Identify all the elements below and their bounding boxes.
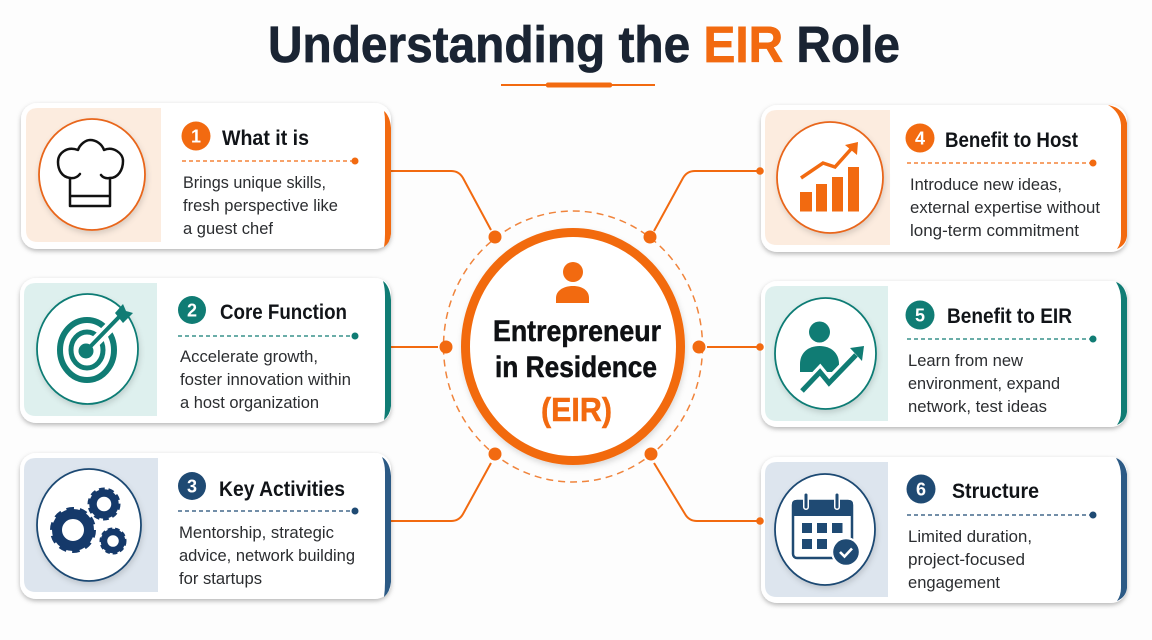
panel: 4 benefit to host: 4 bbox=[915, 128, 925, 148]
panel: 3 key activities bbox=[20, 453, 391, 599]
icon: person with growth arrow bbox=[800, 322, 864, 391]
hub label: (EIR) bbox=[541, 391, 612, 428]
panel: 6 structure: engagement bbox=[908, 574, 1000, 592]
panel: 5 benefit to EIR: Learn from new bbox=[908, 352, 1023, 370]
panel: 1 what it is: What it is bbox=[222, 127, 309, 150]
panel: 5 benefit to EIR bbox=[761, 281, 1127, 427]
panel: 1 what it is: a guest chef bbox=[183, 220, 273, 238]
panel: 2 core function: a host organization bbox=[180, 394, 319, 412]
panel: 2 core function: Accelerate growth, bbox=[180, 348, 318, 366]
hub label bbox=[493, 315, 661, 428]
panel: 5 benefit to EIR: environment, expand bbox=[908, 375, 1060, 393]
panel: 2 core function: Core Function bbox=[220, 301, 347, 324]
icon: rising bar chart bbox=[800, 142, 859, 212]
panel: 3 key activities: advice, network building bbox=[179, 547, 355, 565]
connector end dots on right cards bbox=[756, 167, 764, 525]
title underline bbox=[501, 82, 655, 88]
panel: 5 benefit to EIR: network, test ideas bbox=[908, 398, 1047, 416]
title: Understanding the EIR Role bbox=[268, 16, 900, 73]
panel: 2 core function bbox=[20, 278, 391, 423]
panel: 2 core function: foster innovation within bbox=[180, 371, 351, 389]
panel: 4 benefit to host: Introduce new ideas, bbox=[910, 176, 1062, 194]
panel: 3 key activities: Mentorship, strategic bbox=[179, 524, 334, 542]
connector lines bbox=[391, 171, 760, 521]
panel: 6 structure bbox=[761, 457, 1127, 603]
hub label: Entrepreneur bbox=[493, 315, 661, 348]
hub label: in Residence bbox=[495, 351, 657, 384]
panel: 1 what it is: 1 bbox=[191, 126, 201, 146]
icon: gears bbox=[52, 490, 125, 553]
panel: 6 structure: 6 bbox=[916, 480, 926, 500]
panel: 4 benefit to host bbox=[761, 105, 1127, 252]
icon: calendar with check bbox=[792, 495, 861, 567]
panel: 4 benefit to host: external expertise without bbox=[910, 199, 1100, 217]
central hub: Entrepreneur in Residence bbox=[440, 211, 706, 482]
panel: 6 structure: Structure bbox=[952, 480, 1039, 503]
panel: 3 key activities: 3 bbox=[187, 476, 197, 496]
panel: 6 structure: project-focused bbox=[908, 551, 1025, 569]
panel: 5 benefit to EIR: Benefit to EIR bbox=[947, 305, 1072, 328]
panel: 4 benefit to host: Benefit to Host bbox=[945, 129, 1078, 152]
panel: 1 what it is: fresh perspective like bbox=[183, 197, 338, 215]
panel: 3 key activities: for startups bbox=[179, 570, 262, 588]
panel: 2 core function: 2 bbox=[187, 300, 197, 320]
panel: 6 structure: Limited duration, bbox=[908, 528, 1032, 546]
panel: 4 benefit to host: long-term commitment bbox=[910, 222, 1079, 240]
icon: person bbox=[556, 262, 589, 303]
icon: chef hat bbox=[58, 140, 123, 206]
panel: 5 benefit to EIR: 5 bbox=[915, 306, 925, 326]
panel: 1 what it is: Brings unique skills, bbox=[183, 174, 326, 192]
icon: target with arrow bbox=[60, 304, 133, 380]
panel: 3 key activities: Key Activities bbox=[219, 478, 345, 501]
panel: 1 what it is bbox=[21, 103, 391, 249]
